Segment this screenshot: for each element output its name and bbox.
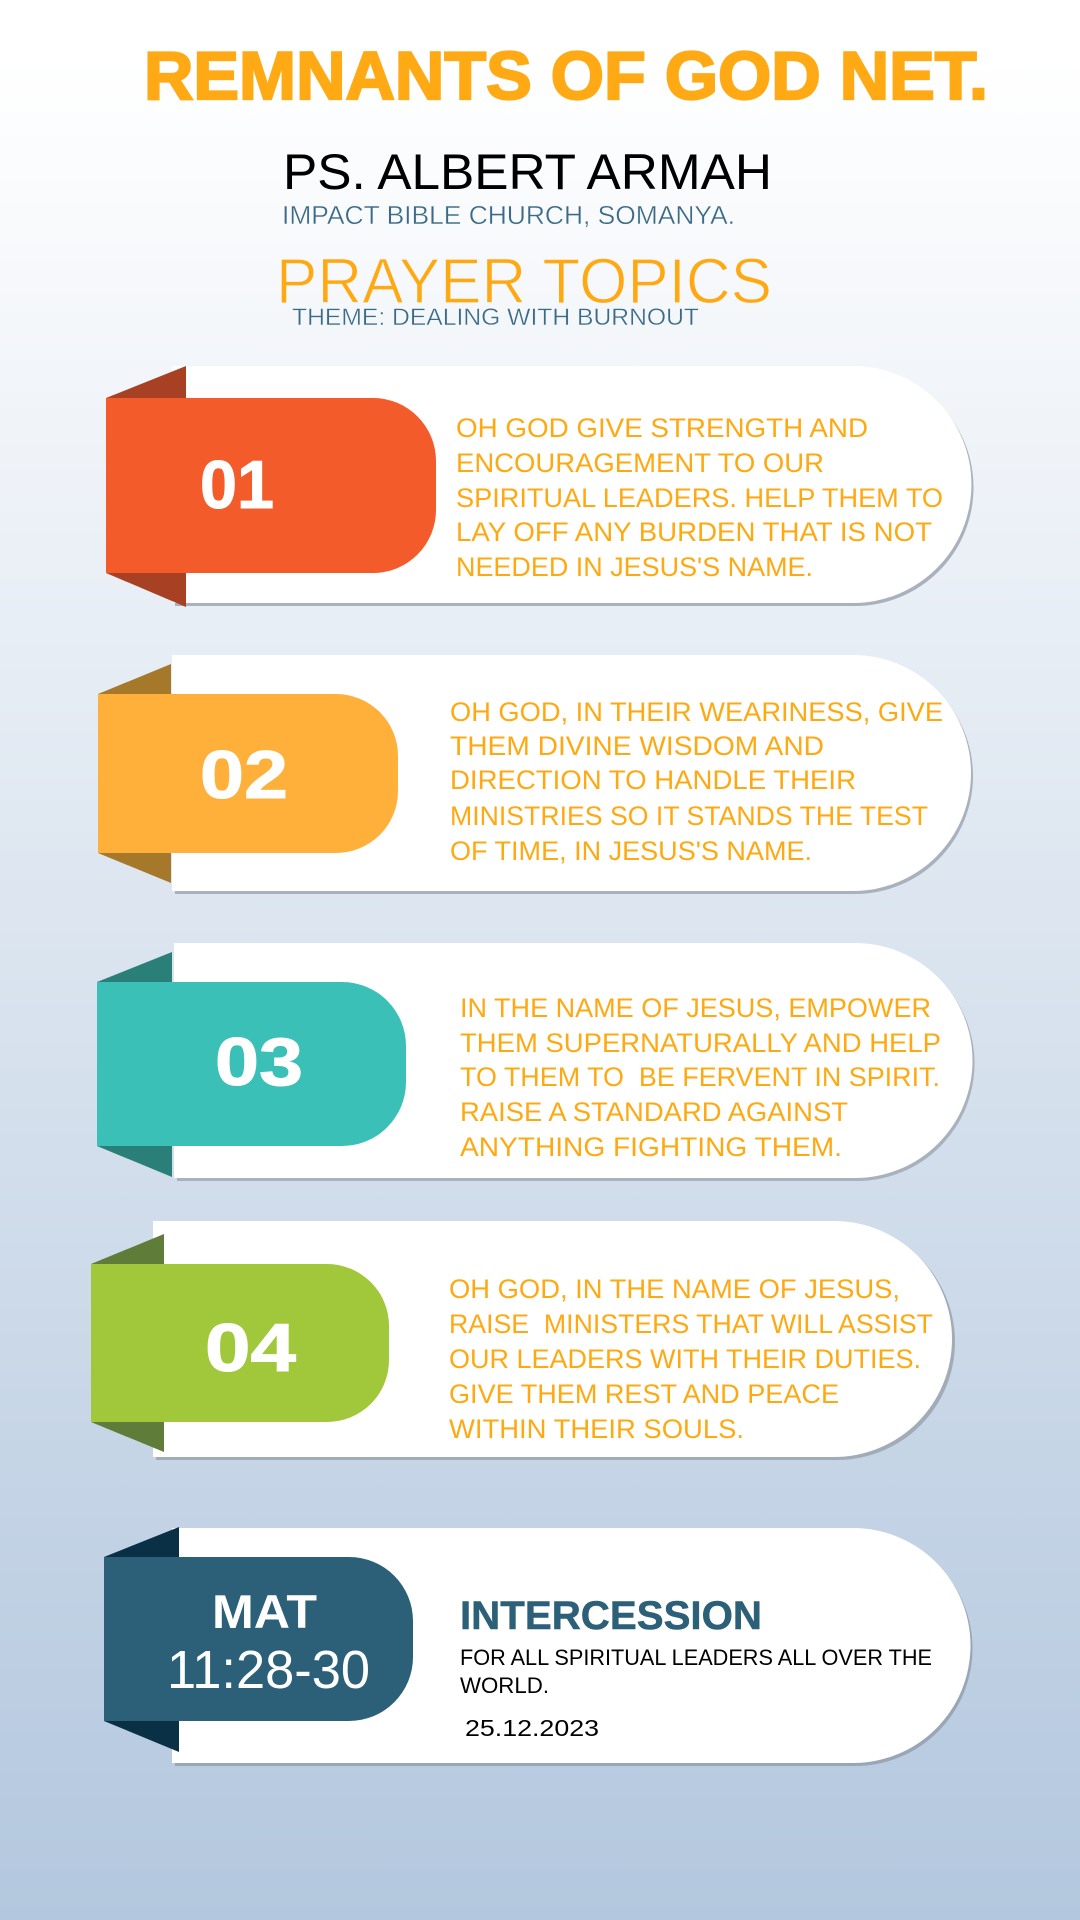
scripture reference: MAT	[212, 1585, 317, 1638]
card shadow	[175, 369, 973, 606]
card	[174, 943, 973, 1178]
fold top	[91, 1234, 164, 1264]
prayer text	[456, 413, 943, 582]
panel: prayer topic 01	[106, 366, 973, 607]
prayer topics heading: PRAYER TOPICS	[276, 245, 772, 317]
card	[172, 366, 971, 603]
prayer text: NEEDED IN JESUS'S NAME.	[456, 552, 813, 582]
fold bottom	[91, 1422, 164, 1452]
prayer text: OH GOD, IN THE NAME OF JESUS,	[449, 1274, 900, 1304]
prayer text: THEM DIVINE WISDOM AND	[450, 731, 824, 761]
prayer text: OF TIME, IN JESUS'S NAME.	[450, 836, 812, 866]
card	[172, 1528, 971, 1763]
panel: prayer topic 03	[97, 943, 974, 1181]
card shadow	[177, 946, 974, 1181]
panel: intercession	[104, 1527, 973, 1766]
prayer text: IN THE NAME OF JESUS, EMPOWER	[460, 993, 931, 1023]
header	[144, 38, 988, 331]
card	[153, 1221, 952, 1457]
prayer text: DIRECTION TO HANDLE THEIR	[450, 765, 856, 795]
intercession text	[460, 1645, 932, 1698]
theme: THEME: DEALING WITH BURNOUT	[292, 304, 699, 331]
fold top	[97, 952, 172, 982]
prayer text	[449, 1274, 933, 1444]
fold top	[98, 664, 171, 694]
fold top	[106, 366, 186, 398]
fold bottom	[104, 1721, 179, 1752]
prayer text: RAISE A STANDARD AGAINST	[460, 1097, 848, 1127]
prayer text: SPIRITUAL LEADERS. HELP THEM TO	[456, 483, 943, 513]
church name: IMPACT BIBLE CHURCH, SOMANYA.	[282, 202, 735, 230]
speaker name: PS. ALBERT ARMAH	[283, 144, 772, 200]
card	[172, 655, 971, 891]
prayer text: GIVE THEM REST AND PEACE	[449, 1379, 839, 1409]
card shadow	[175, 658, 973, 894]
date: 25.12.2023	[465, 1715, 599, 1741]
number 01: 01	[200, 447, 274, 523]
prayer text: OUR LEADERS WITH THEIR DUTIES.	[449, 1344, 921, 1374]
prayer text: RAISE MINISTERS THAT WILL ASSIST	[449, 1309, 933, 1339]
number 04: 04	[205, 1310, 296, 1386]
fold bottom	[97, 1146, 172, 1177]
prayer text: OH GOD, IN THEIR WEARINESS, GIVE	[450, 697, 943, 727]
prayer text: ENCOURAGEMENT TO OUR	[456, 448, 824, 478]
ribbon	[104, 1557, 413, 1721]
prayer text: OH GOD GIVE STRENGTH AND	[456, 413, 868, 443]
scripture reference: 11:28-30	[167, 1640, 370, 1700]
fold bottom	[98, 853, 171, 883]
intercession heading: INTERCESSION	[460, 1594, 762, 1638]
title: REMNANTS OF GOD NET.	[144, 38, 988, 114]
fold bottom	[106, 573, 186, 607]
ribbon	[91, 1264, 389, 1422]
number 03: 03	[215, 1024, 303, 1100]
prayer text	[450, 697, 943, 866]
card shadow	[175, 1531, 973, 1766]
prayer text: WITHIN THEIR SOULS.	[449, 1414, 744, 1444]
ribbon	[97, 982, 406, 1146]
number 02: 02	[200, 737, 288, 813]
prayer text: MINISTRIES SO IT STANDS THE TEST	[450, 801, 928, 831]
intercession text: FOR ALL SPIRITUAL LEADERS ALL OVER THE	[460, 1645, 932, 1670]
scripture reference	[167, 1585, 370, 1700]
ribbon	[98, 694, 398, 853]
prayer text: LAY OFF ANY BURDEN THAT IS NOT	[456, 517, 932, 547]
prayer text: THEM SUPERNATURALLY AND HELP	[460, 1028, 941, 1058]
panel: prayer topic 02	[98, 655, 973, 894]
ribbon	[106, 398, 436, 573]
card shadow	[156, 1224, 955, 1460]
prayer text: TO THEM TO BE FERVENT IN SPIRIT.	[460, 1062, 940, 1092]
prayer text: ANYTHING FIGHTING THEM.	[460, 1132, 842, 1162]
intercession text: WORLD.	[460, 1673, 549, 1698]
panel: prayer topic 04	[91, 1221, 955, 1460]
fold top	[104, 1527, 179, 1557]
prayer text	[460, 993, 941, 1162]
